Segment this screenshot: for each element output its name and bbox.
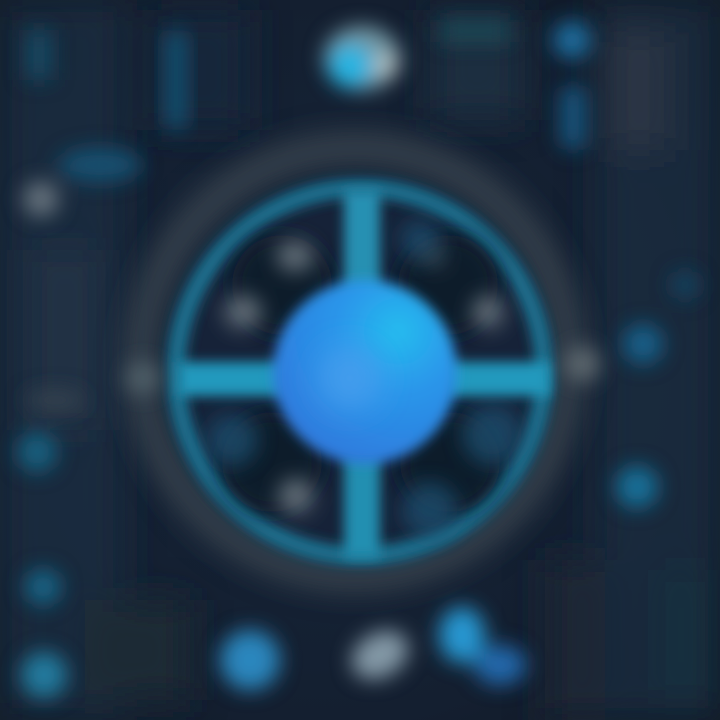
icon: bottom right blue (439, 607, 485, 663)
central blue circle (273, 280, 457, 464)
segment grey markers (224, 240, 504, 514)
left bottom dot (21, 652, 67, 698)
top left vertical bar (165, 30, 187, 130)
top right dot (553, 21, 591, 59)
left lower dot (25, 569, 61, 605)
icon: upper left grey dot (23, 181, 59, 217)
spokes (178, 190, 550, 558)
hub diagram (126, 148, 600, 576)
top centre-right tint (440, 20, 510, 42)
ring nodes (126, 346, 600, 395)
left teal bar (58, 148, 142, 182)
left column icons (17, 30, 142, 698)
segment tints (206, 220, 522, 538)
core highlight (318, 346, 382, 410)
ring interior (178, 190, 542, 554)
right column icons (440, 20, 699, 508)
icon: bottom centre grey (343, 621, 417, 689)
right dot (623, 324, 663, 364)
icon: bottom left blue (220, 630, 280, 690)
right lower dot (616, 466, 658, 508)
dark segments (222, 235, 500, 512)
right small tint (671, 271, 699, 299)
bottom icons (220, 607, 526, 690)
left teal dot (17, 432, 57, 472)
left top marker (26, 30, 52, 80)
teal ring (176, 188, 544, 556)
top right lower bar (560, 85, 586, 150)
left grey label (25, 390, 85, 410)
icon: top cloud (324, 26, 400, 90)
outer grey ring (141, 148, 569, 576)
